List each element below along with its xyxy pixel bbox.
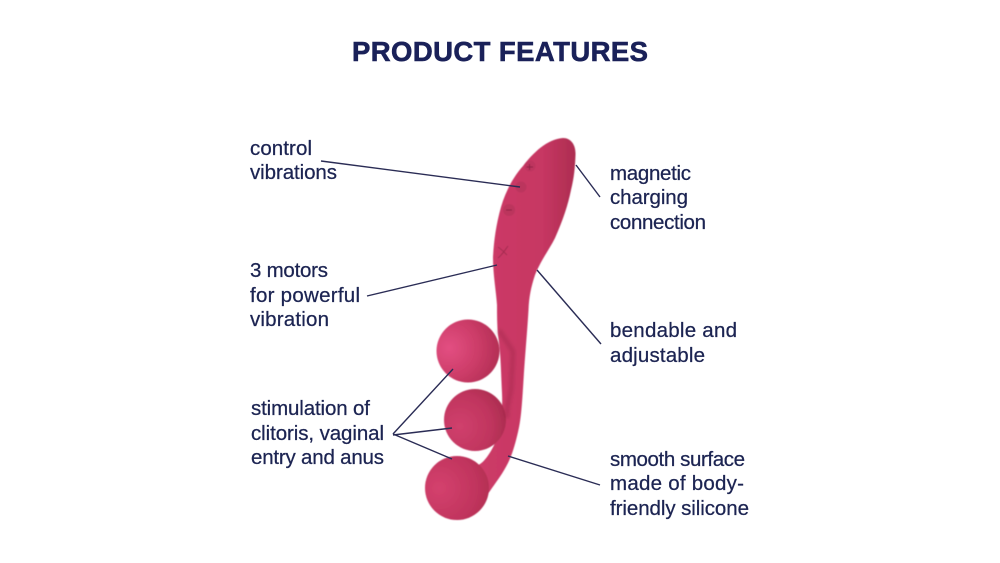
body of the device — [442, 138, 576, 520]
label: stimulation: clitoris, vaginal — [251, 422, 384, 445]
label: bendable: adjustable — [610, 344, 705, 367]
middle ball — [444, 389, 506, 451]
label: 3 motors — [250, 259, 497, 331]
label: bendable — [537, 270, 737, 367]
label: smooth surface: smooth surface — [610, 448, 745, 471]
product illustration — [425, 138, 576, 520]
label: magnetic charging: connection — [610, 211, 706, 234]
label: stimulation: entry and anus — [251, 446, 384, 469]
label: 3 motors: for powerful — [250, 284, 360, 307]
label: smooth surface: made of body- — [610, 472, 744, 495]
top ball — [436, 320, 500, 382]
brand logo — [498, 246, 508, 258]
label: magnetic charging: charging — [610, 186, 688, 209]
label: bendable: bendable and — [610, 319, 737, 342]
button: plus — [524, 160, 536, 172]
label: magnetic charging: magnetic — [610, 162, 691, 185]
neck shadow — [499, 330, 513, 418]
label: 3 motors: vibration — [250, 308, 329, 331]
label: control vibrations: vibrations — [250, 161, 337, 184]
lower ball — [425, 456, 489, 520]
label: stimulation: stimulation of — [251, 397, 370, 420]
label: stimulation — [251, 369, 453, 469]
label: smooth surface — [508, 448, 749, 520]
label: 3 motors: 3 motors — [250, 259, 328, 282]
label: control vibrations: control — [250, 137, 312, 160]
title: PRODUCT FEATURES — [352, 36, 648, 67]
button: centre — [516, 182, 526, 192]
label: smooth surface: friendly silicone — [610, 497, 749, 520]
button: minus — [503, 204, 515, 216]
label: magnetic charging — [576, 162, 706, 234]
label: control vibrations — [250, 137, 520, 187]
